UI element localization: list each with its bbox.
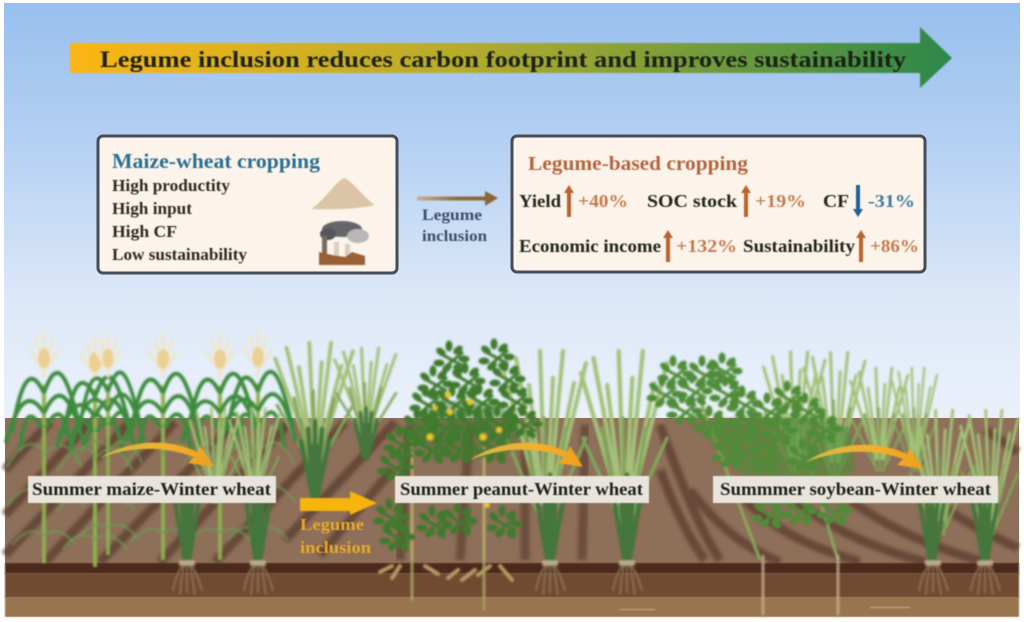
soybean foliage bbox=[647, 353, 855, 560]
label: peanut system: Summer peanut-Winter wheat bbox=[400, 479, 643, 499]
arrow: legume inclusion in field bbox=[300, 491, 377, 557]
crops bbox=[6, 331, 1018, 615]
curved arrow: soybean to wheat bbox=[806, 445, 923, 469]
title arrow bbox=[70, 27, 952, 88]
list: High input bbox=[112, 199, 193, 218]
soil furrows centre bbox=[400, 425, 585, 560]
maize plants bbox=[6, 331, 296, 567]
metric row 1: SOC stock bbox=[647, 191, 737, 211]
label: soybean system: Summmer soybean-Winter wheat bbox=[720, 479, 991, 499]
metric row 2: +86% bbox=[870, 236, 919, 256]
list bbox=[112, 176, 248, 264]
soil furrows left bbox=[5, 422, 395, 562]
peanut pods and roots bbox=[380, 560, 512, 610]
label: Legume bbox=[300, 515, 364, 534]
metric row 1: +19% bbox=[755, 191, 806, 211]
heading: Maize-wheat cropping bbox=[112, 149, 320, 173]
label bbox=[300, 515, 371, 557]
arrow: legume inclusion bbox=[417, 191, 498, 245]
label bbox=[422, 207, 487, 245]
label: inclusion bbox=[300, 538, 371, 557]
list: Low sustainability bbox=[112, 245, 248, 264]
metric row 2: +132% bbox=[676, 236, 737, 256]
icon: fertilizer pile bbox=[311, 178, 375, 209]
peanut plants bbox=[374, 339, 542, 600]
heading: Legume-based cropping bbox=[528, 153, 749, 175]
background wheat: maize system bbox=[275, 342, 396, 497]
soybean plants and wheat bbox=[764, 352, 1018, 595]
foreground wheat: maize system bbox=[173, 408, 279, 595]
label: maize system bbox=[28, 476, 276, 503]
panel: legume-based cropping bbox=[512, 136, 925, 272]
label: soybean system bbox=[713, 476, 998, 503]
metric row 1: CF bbox=[823, 191, 849, 211]
panel: maize-wheat cropping bbox=[98, 136, 397, 273]
sky background bbox=[4, 3, 1020, 423]
icon: factory with smoke bbox=[319, 221, 369, 265]
soybean taproots bbox=[763, 555, 838, 615]
metric row 1 bbox=[519, 185, 915, 217]
bottom soil layer bbox=[5, 597, 1019, 617]
dark soil band bbox=[5, 563, 1019, 574]
label: peanut system bbox=[395, 476, 649, 503]
title: Legume inclusion reduces carbon footprint and improves sustainability bbox=[100, 47, 906, 73]
label: maize system: Summer maize-Winter wheat bbox=[32, 479, 271, 499]
peanut flowers bbox=[426, 392, 502, 508]
metric row 2: Sustainability bbox=[743, 236, 855, 256]
middle soil layer bbox=[5, 573, 1019, 598]
metric row 2 bbox=[519, 230, 919, 262]
metric row 2: Economic income bbox=[519, 236, 661, 256]
label: inclusion bbox=[422, 228, 487, 245]
metric row 1: Yield bbox=[519, 191, 561, 211]
curved arrow: maize to wheat bbox=[100, 443, 214, 467]
soil furrows right bbox=[660, 425, 1018, 562]
list: High CF bbox=[112, 222, 177, 241]
metric row 1: +40% bbox=[578, 191, 628, 211]
metric row 1: -31% bbox=[868, 191, 915, 211]
soil cross-section bbox=[5, 418, 1019, 617]
list: High productity bbox=[112, 176, 231, 195]
label: Legume bbox=[422, 207, 482, 224]
wheat: peanut system bbox=[504, 351, 667, 595]
curved arrow: peanut to wheat bbox=[470, 443, 583, 467]
